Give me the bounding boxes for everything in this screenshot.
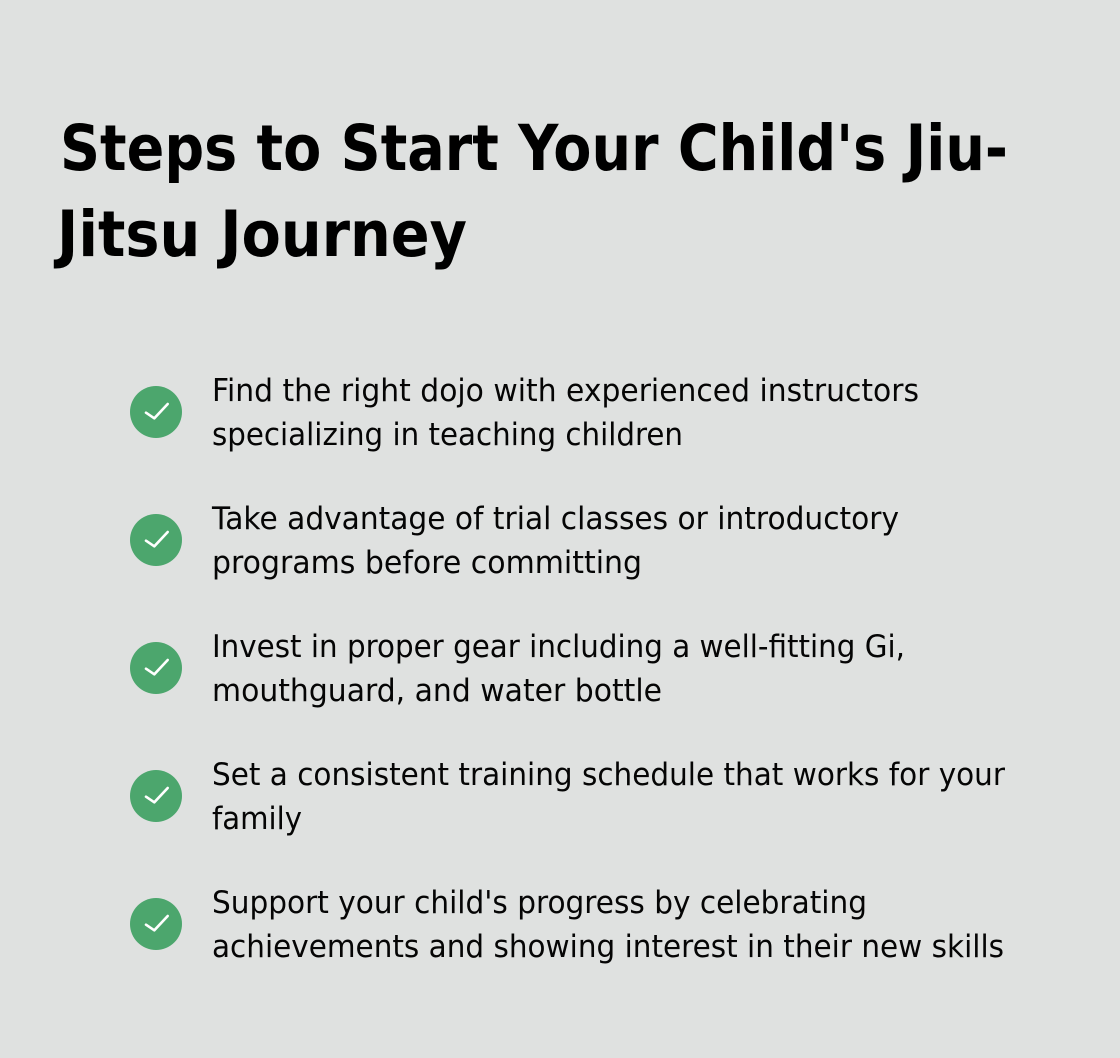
step 4 text: family [212,801,302,837]
step 2 text [211,501,899,581]
step 1 text: specializing in teaching children [212,417,683,453]
step 5 text: Support your child's progress by celebrating [212,885,867,921]
step 5 text: achievements and showing interest in their new skills [212,929,1004,965]
title [53,112,1008,271]
step 4 text [212,757,1005,837]
step 3 text [212,629,905,709]
step 4 [130,757,1005,837]
step 2 text: programs before committing [212,545,642,581]
step 2 [130,501,899,581]
icon: check circle [130,642,182,694]
step 5 [130,885,1004,965]
step 5 text [212,885,1004,965]
step 3 [130,629,905,709]
icon: check circle [130,770,182,822]
step 1 [130,373,919,453]
title: Jitsu Journey [53,198,467,271]
step 1 text [212,373,919,453]
icon: check circle [130,514,182,566]
step 3 text: mouthguard, and water bottle [212,673,662,709]
title: Steps to Start Your Child's Jiu- [60,112,1008,185]
step 4 text: Set a consistent training schedule that works for your [212,757,1005,793]
step 1 text: Find the right dojo with experienced instructors [212,373,919,409]
checklist [130,373,1005,965]
step 3 text: Invest in proper gear including a well-fitting Gi, [212,629,905,665]
icon: check circle [130,898,182,950]
icon: check circle [130,386,182,438]
step 2 text: Take advantage of trial classes or introductory [211,501,899,537]
